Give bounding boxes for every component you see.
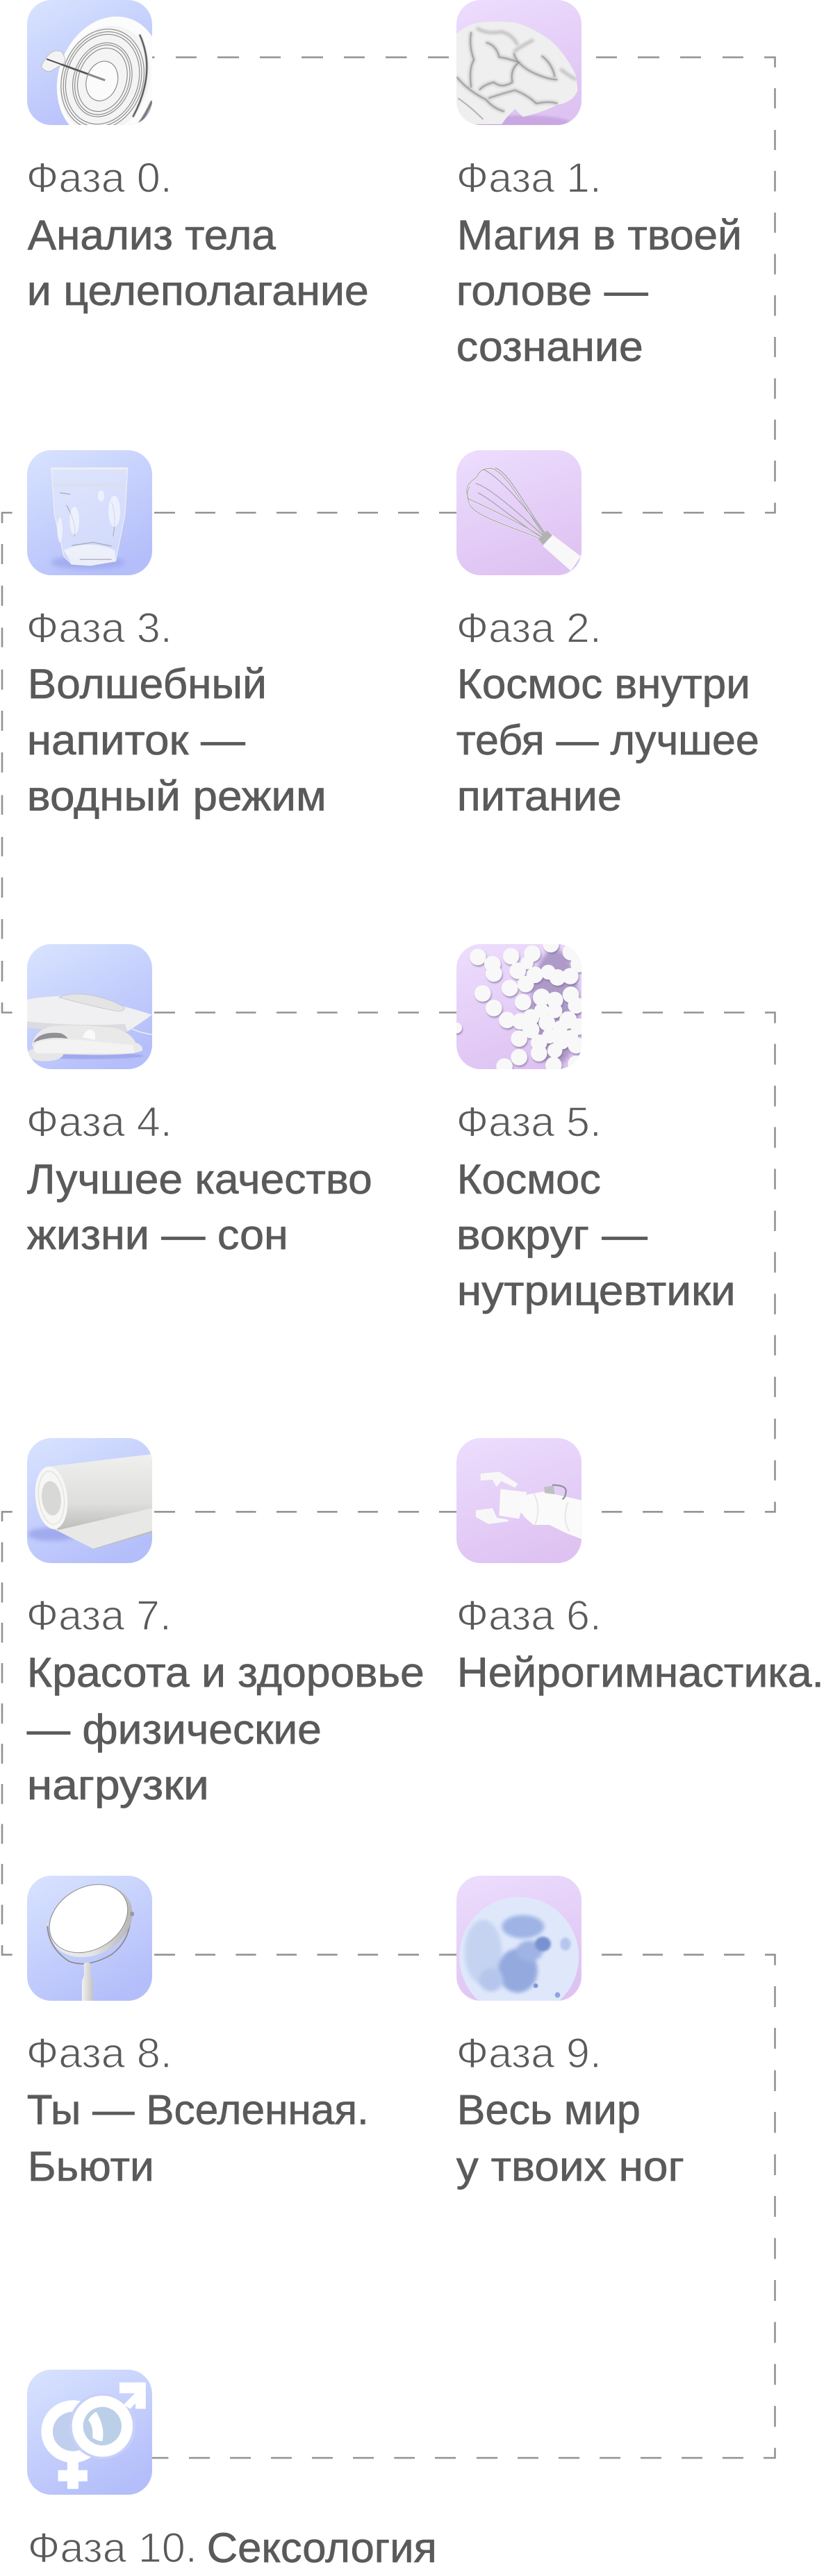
icon: pillow and slippers — [26, 944, 153, 1069]
label and title: phase 10 — [28, 2525, 437, 2571]
phase 0 — [26, 0, 369, 314]
title: phase 8: Ты — Вселенная. — [27, 2086, 369, 2133]
icon: target with dart — [27, 0, 152, 125]
label: phase 8: Фаза 8. — [26, 2030, 172, 2077]
title: phase 3: Волшебный — [28, 661, 267, 707]
icon: gender symbols — [27, 2370, 152, 2495]
title: phase 5: Космос — [457, 1156, 601, 1203]
label: phase 9: Фаза 9. — [456, 2030, 602, 2077]
title: phase 1: Магия в твоей — [457, 212, 742, 258]
label: phase 3: Фаза 3. — [26, 604, 172, 651]
phase 4 — [26, 944, 372, 1258]
icon: moon — [456, 1876, 582, 2001]
phase 10 — [27, 2370, 437, 2571]
title: phase 2: Космос внутри — [457, 661, 750, 707]
title: phase 6: Нейрогимнастика. — [457, 1649, 824, 1696]
icon: glass of water — [27, 450, 152, 575]
label: phase 7: Фаза 7. — [26, 1592, 172, 1639]
label: phase 0: Фаза 0. — [26, 154, 172, 201]
title line: phase 0: и целеполагание — [27, 267, 369, 314]
title line: phase 9: у твоих ног — [456, 2143, 684, 2190]
label: phase 6: Фаза 6. — [456, 1592, 602, 1639]
label: phase 5: Фаза 5. — [456, 1098, 602, 1145]
title line: phase 5: вокруг — — [456, 1212, 648, 1258]
title line: phase 4: жизни — сон — [27, 1212, 288, 1258]
label: phase 2: Фаза 2. — [456, 604, 602, 651]
title line: phase 8: Бьюти — [28, 2143, 154, 2190]
label and title: phase 10: Фаза 10. — [28, 2525, 197, 2571]
phase 6 — [456, 1438, 824, 1696]
title: phase 4: Лучшее качество — [27, 1156, 372, 1203]
title: phase 9: Весь мир — [457, 2086, 641, 2133]
icon: rolled yoga mat — [27, 1438, 154, 1563]
icon: brain — [454, 0, 582, 129]
title line: phase 3: напиток — — [27, 717, 245, 763]
icon: pills — [456, 944, 582, 1069]
label: phase 4: Фаза 4. — [26, 1098, 172, 1145]
phase 9 — [456, 1876, 684, 2190]
title: phase 7: Красота и здоровье — [27, 1649, 424, 1696]
title line: phase 2: питание — [457, 773, 622, 819]
icon: robotic arm — [456, 1438, 582, 1563]
icon: whisk — [456, 450, 582, 575]
phase 7 — [26, 1438, 424, 1808]
icon: round mirror — [27, 1870, 152, 2001]
title line: phase 1: голове — — [456, 267, 648, 314]
title line: phase 3: водный режим — [27, 773, 327, 819]
label: phase 1: Фаза 1. — [456, 154, 602, 201]
title line: phase 7: нагрузки — [27, 1762, 209, 1808]
title line: phase 2: тебя — лучшее — [456, 717, 759, 763]
phase 1 — [454, 0, 742, 370]
title: phase 0: Анализ тела — [28, 212, 276, 258]
phase 5 — [452, 936, 736, 1314]
label and title: phase 10: Сексология — [207, 2525, 437, 2571]
phase 8 — [26, 1870, 369, 2190]
title line: phase 7: — физические — [27, 1706, 322, 1753]
phase 3 — [26, 450, 327, 819]
title line: phase 1: сознание — [456, 323, 643, 370]
phase 2 — [456, 450, 759, 819]
title line: phase 5: нутрицевтики — [457, 1267, 736, 1314]
